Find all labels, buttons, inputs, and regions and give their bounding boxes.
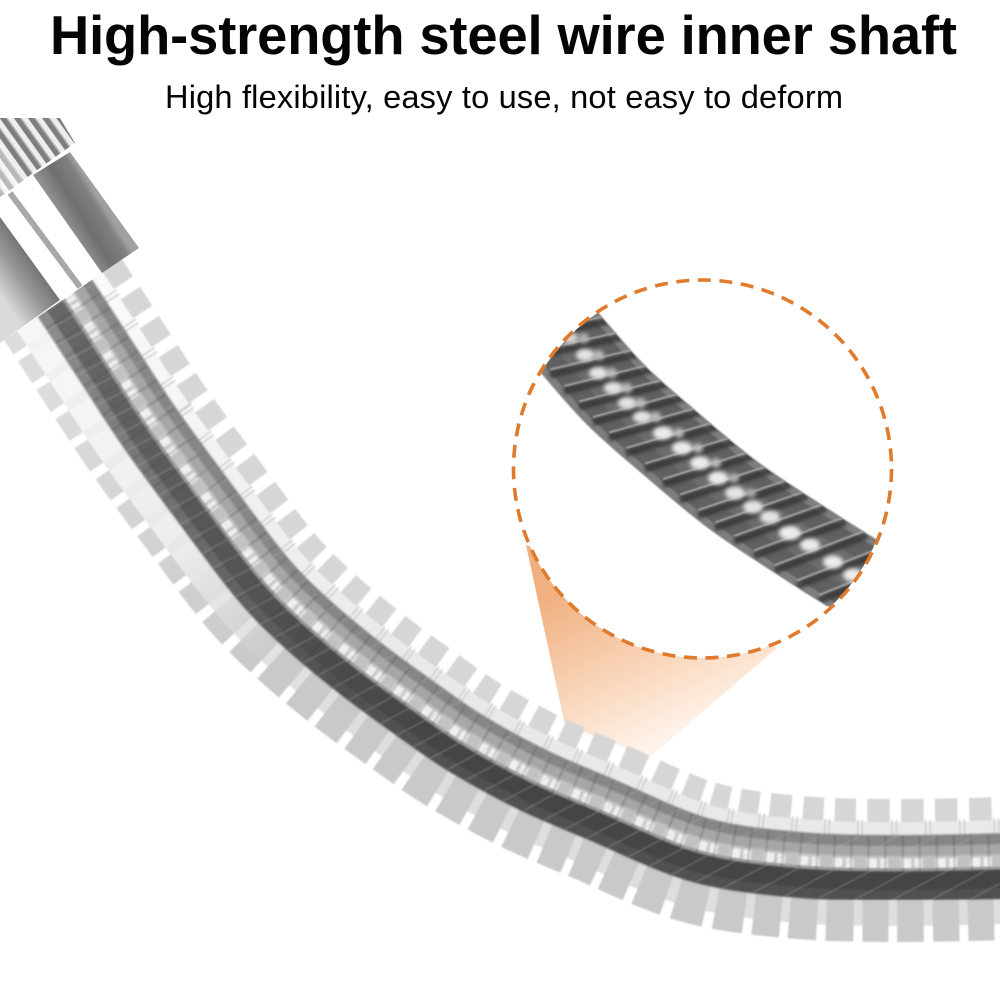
magnified steel hose [541, 312, 876, 606]
circle background [514, 280, 892, 658]
zoom cone highlight [526, 545, 777, 757]
sleeve lower tabs [25, 238, 1000, 868]
title: High-strength steel wire inner shaft [50, 5, 957, 66]
barrel [0, 217, 60, 343]
gray stripe [10, 193, 80, 287]
threaded metal fitting [0, 118, 139, 343]
subtitle: High flexibility, easy to use, not easy to deform [165, 78, 843, 115]
core wire texture [49, 285, 1000, 900]
steel core upper half [66, 279, 1000, 868]
white metal band [0, 152, 102, 343]
dashed orange ring [514, 280, 892, 658]
hose with transparent sleeve and steel core [4, 260, 1000, 942]
core seams [25, 238, 1000, 868]
knurled collar [0, 118, 75, 197]
magnifier circle [514, 280, 911, 658]
dark sleeve block [33, 152, 139, 273]
sleeve upper tabs [102, 260, 1000, 836]
steel core lower half [25, 238, 1000, 868]
